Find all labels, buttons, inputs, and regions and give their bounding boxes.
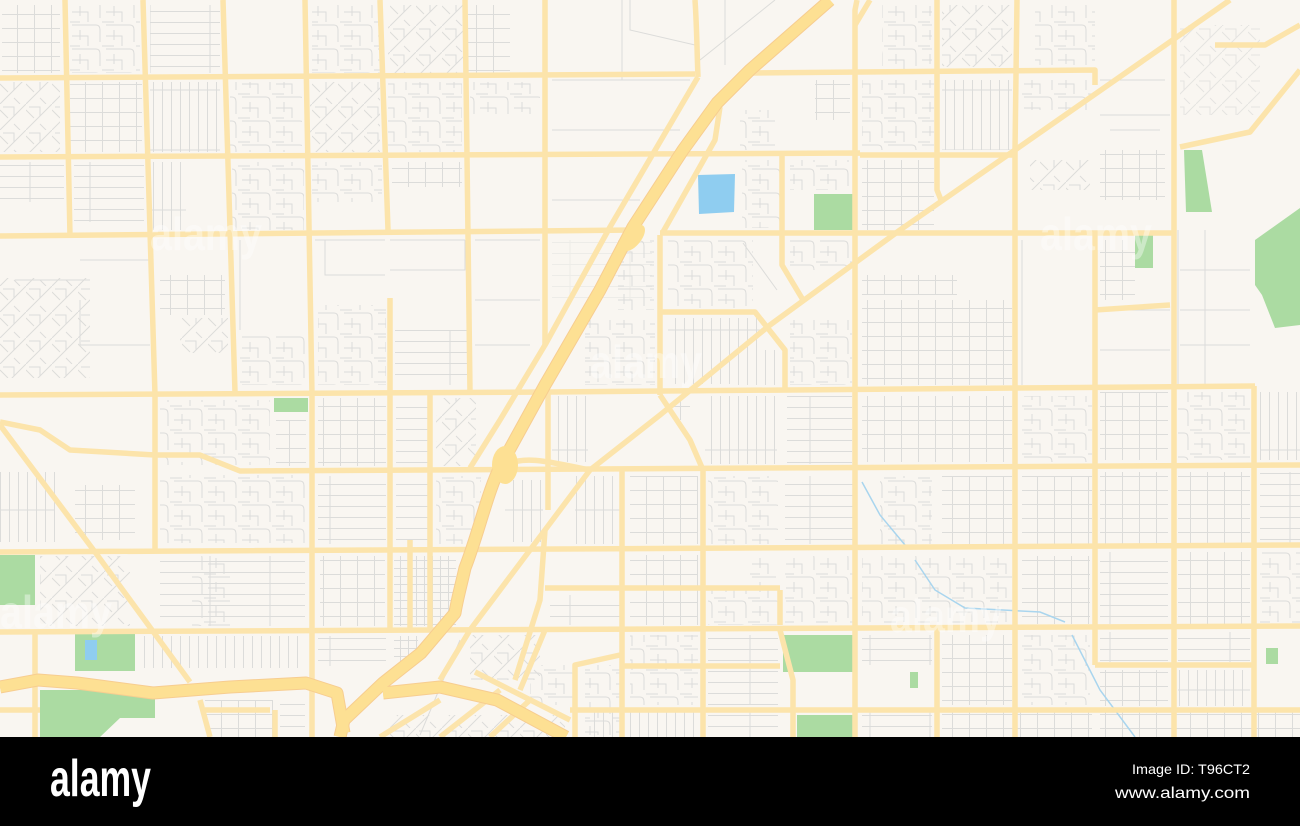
watermark text: alamy (0, 586, 112, 638)
bottom footer bar (0, 737, 1300, 826)
watermark text: alamy (890, 590, 1002, 642)
website address: www.alamy.com (1114, 785, 1250, 802)
watermark text: alamy (1040, 208, 1152, 260)
watermark text (0, 208, 1152, 642)
alamy logo: alamy (50, 750, 151, 808)
watermark text: alamy (590, 336, 702, 388)
highways (0, 0, 830, 737)
watermark text: alamy (150, 208, 262, 260)
water: lake and streams (85, 174, 1135, 737)
parks (0, 150, 1300, 737)
image id: Image ID: T96CT2 (1132, 761, 1250, 777)
